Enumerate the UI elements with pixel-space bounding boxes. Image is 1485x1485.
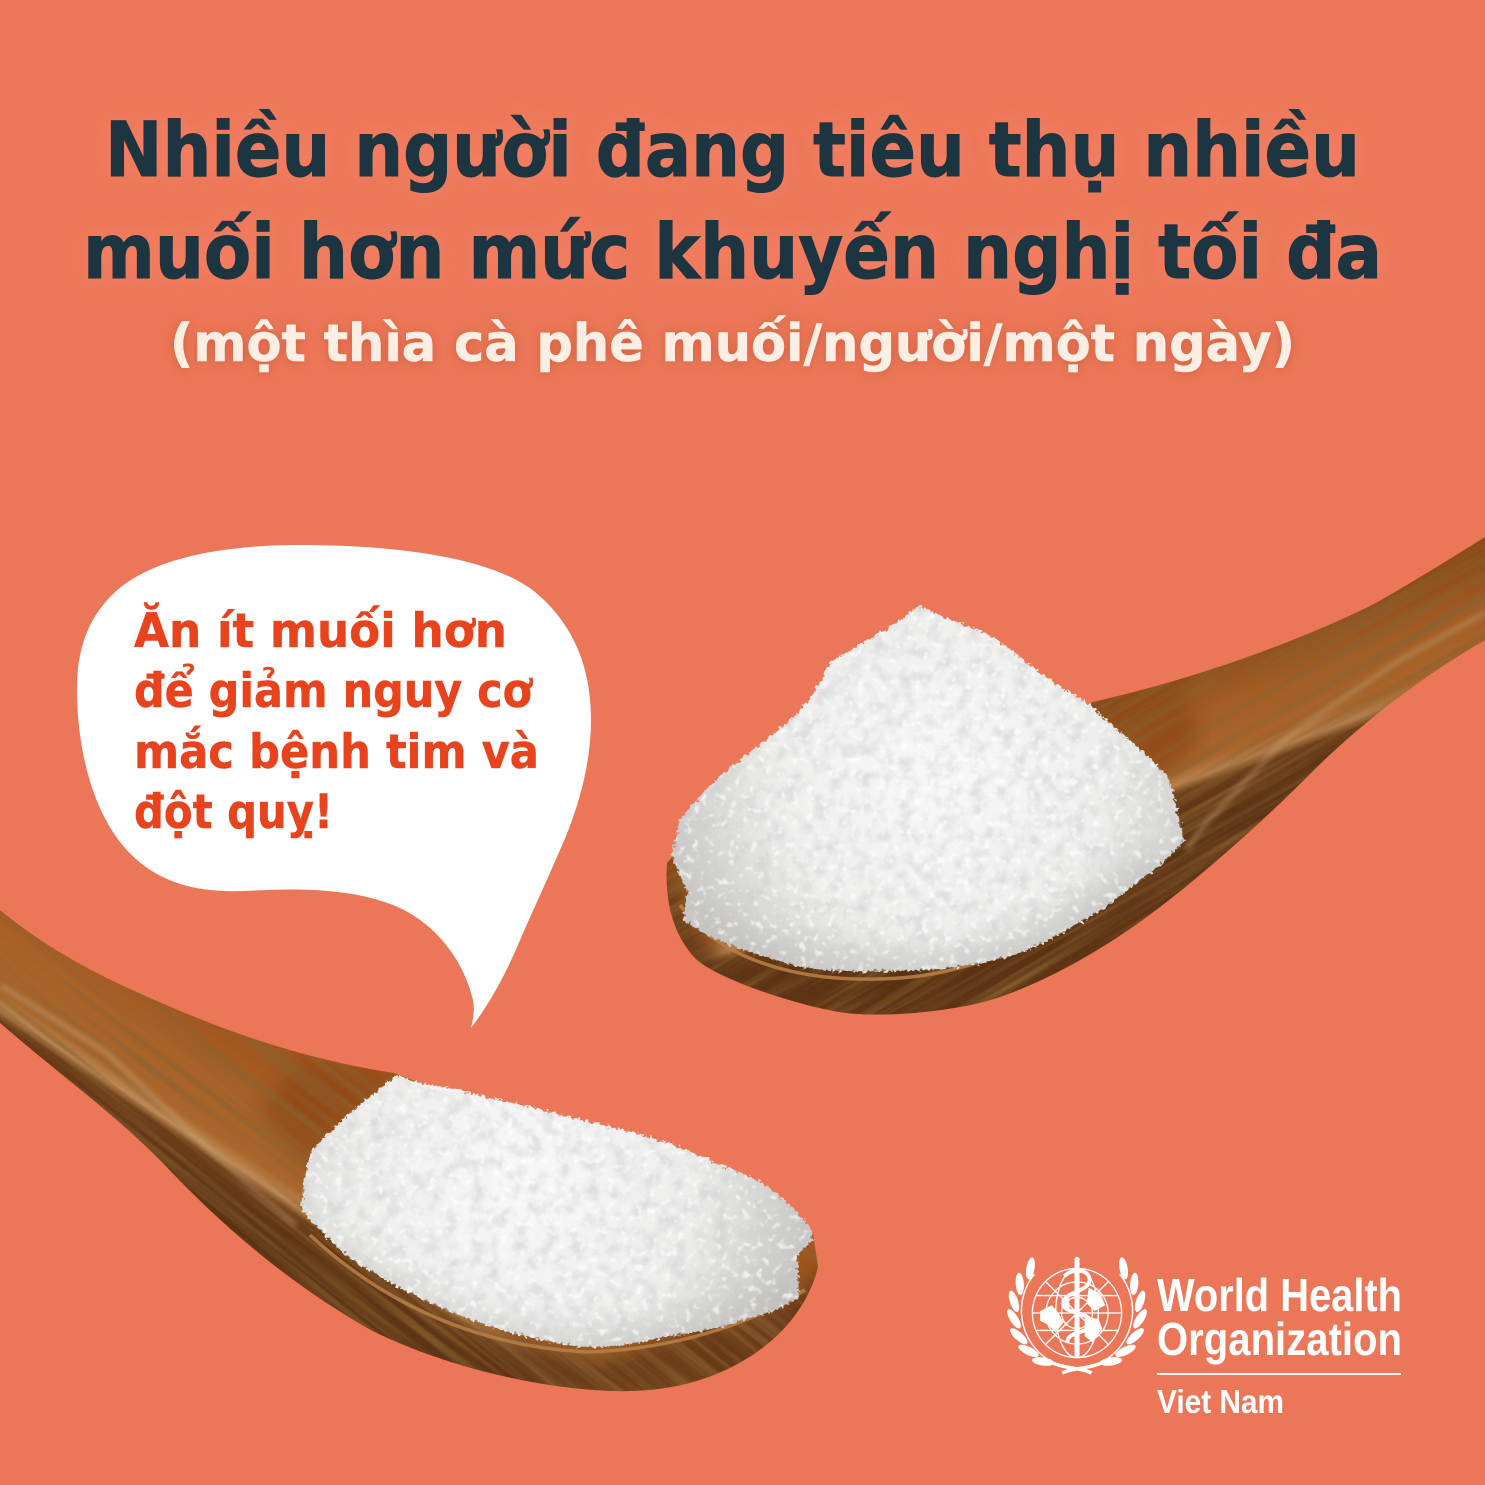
WHO wordmark [1157,1269,1402,1365]
WHO logo [1005,1257,1402,1420]
bubble text: Ăn ít muối hơn [134,603,507,659]
spoon body [0,905,830,1400]
bubble text: đột quỵ! [134,785,333,840]
title: Nhiều người đang tiêu thụ nhiều [105,105,1360,194]
bubble shape [77,545,591,1028]
WHO wordmark: Organization [1157,1313,1402,1365]
bubble text [134,603,539,840]
laurel left [1005,1257,1055,1367]
salt pile [672,605,1184,971]
laurel right [1099,1257,1149,1367]
spoon with salt: upper right [650,530,1485,1040]
bubble text: để giảm nguy cơ [134,664,534,719]
spoon body [650,530,1485,1040]
title: muối hơn mức khuyến nghị tối đa [83,207,1382,296]
ribbon [1048,1361,1106,1373]
spoon with salt: lower left [0,905,830,1400]
icon: WHO emblem [1005,1257,1149,1373]
continents [1040,1288,1105,1342]
bubble text: mắc bệnh tim và [134,725,539,780]
globe [1032,1268,1122,1358]
subtitle: (một thìa cà phê muối/người/một ngày) [170,314,1295,374]
staff and serpent [1063,1257,1091,1358]
country name: Viet Nam [1157,1383,1284,1420]
speech bubble [77,545,591,1028]
salt pile [302,1075,813,1347]
WHO wordmark: World Health [1157,1269,1402,1321]
title [83,105,1382,296]
